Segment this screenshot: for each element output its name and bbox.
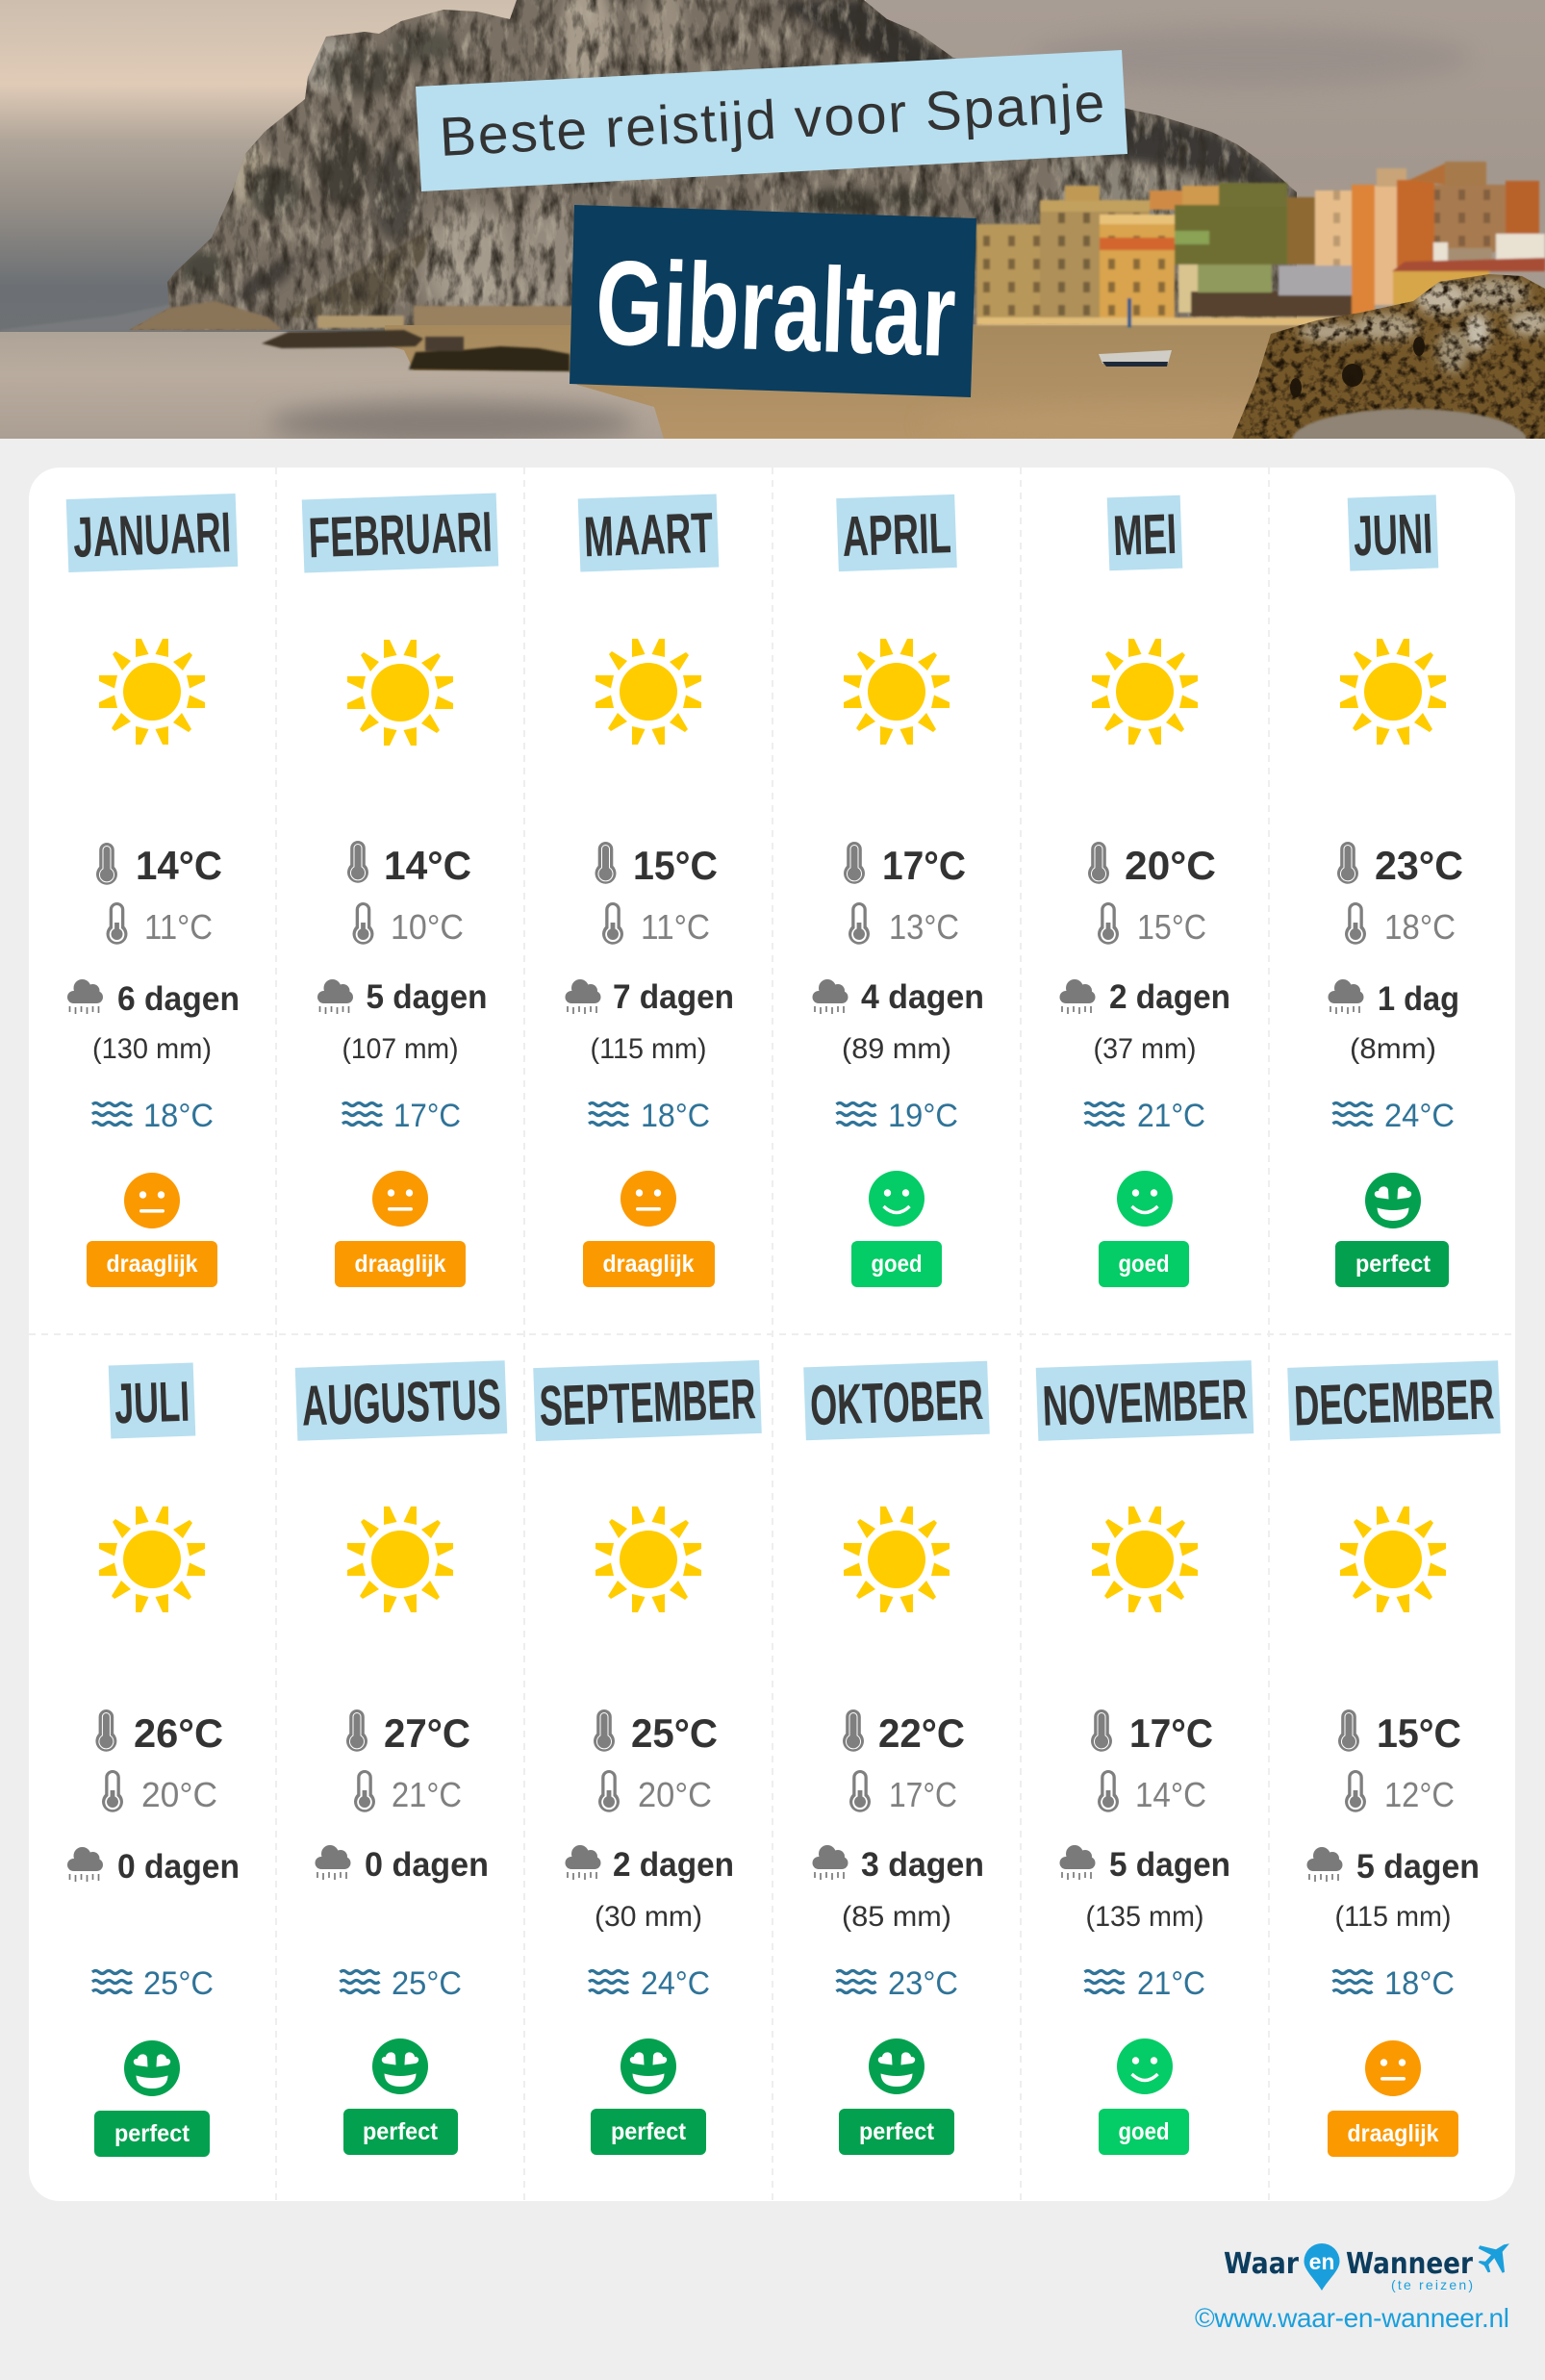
boat [1099, 350, 1172, 367]
rain days: 5 dagen [366, 978, 487, 1016]
subtitle label: Beste reistijd voor Spanje: Beste reistijd voor Spanje [438, 72, 1106, 168]
rating badge [87, 1241, 217, 1287]
sea temperature: 19°C [888, 1098, 958, 1134]
logo: Waar en Wanneer: Waar [1224, 2247, 1299, 2281]
low temperature: 13°C [889, 907, 959, 947]
sea temperature [92, 1098, 214, 1134]
month label: november [1036, 1360, 1254, 1441]
rainfall: (37 mm) [1093, 1033, 1197, 1065]
sea temperature [1333, 1098, 1455, 1134]
high temperature: 17°C [882, 843, 966, 888]
month label: mei [1107, 495, 1182, 570]
high temperature [347, 841, 471, 888]
sea temperature [1333, 1965, 1455, 2002]
logo: Waar en Wanneer: (te reizen) [1391, 2277, 1473, 2292]
rainfall: (130 mm) [92, 1033, 212, 1065]
sea temperature: 24°C [641, 1965, 710, 2002]
high temperature: 14°C [384, 843, 471, 888]
rating badge: perfect [114, 2120, 190, 2147]
rating badge [1335, 1241, 1449, 1287]
icon: sun [347, 1506, 453, 1612]
rating badge: perfect [859, 2118, 935, 2145]
high temperature: 26°C [134, 1710, 223, 1756]
cell: juni [1328, 494, 1463, 1287]
sea reflection [269, 402, 635, 444]
icon: sun [347, 640, 453, 746]
icon: sun [844, 1506, 950, 1612]
rain days [67, 979, 240, 1018]
sea temperature [837, 1098, 958, 1134]
low temperature: 18°C [1384, 907, 1456, 947]
month label: april [836, 494, 957, 571]
rating badge: goed [1118, 1251, 1170, 1278]
rain days: 2 dagen [1109, 978, 1230, 1016]
sea temperature: 24°C [1384, 1098, 1455, 1134]
month label: januari [66, 494, 238, 572]
high temperature [96, 843, 222, 888]
month label: augustus [295, 1360, 507, 1441]
high temperature: 27°C [384, 1710, 470, 1756]
rain days: 4 dagen [861, 978, 984, 1016]
beach sand [385, 325, 1300, 439]
cell: maart [566, 494, 734, 1287]
rating badge: perfect [611, 2118, 687, 2145]
rain days [566, 978, 734, 1016]
high temperature: 14°C [136, 843, 222, 888]
icon: sun [595, 639, 701, 745]
month label: maart: MAART [583, 501, 714, 569]
sea temperature [589, 1965, 710, 2002]
rain days [317, 978, 487, 1016]
high temperature [1091, 1709, 1213, 1756]
rainfall: (8mm) [1350, 1033, 1436, 1065]
month label: november: NOVEMBER [1041, 1367, 1249, 1438]
cell: augustus [295, 1360, 507, 2155]
month label: januari: JANUARI [72, 500, 232, 570]
low temperature [598, 1770, 712, 1814]
icon: sun [99, 639, 205, 745]
high temperature [1088, 842, 1216, 888]
rating badge: draaglijk [106, 1251, 198, 1278]
rating badge [343, 2109, 458, 2155]
rating face [869, 2038, 924, 2094]
low temperature: 12°C [1384, 1775, 1455, 1814]
rating badge: draaglijk [1347, 2120, 1439, 2147]
buildings [976, 162, 1545, 327]
rating face [1117, 1171, 1173, 1227]
low temperature: 20°C [141, 1775, 217, 1814]
rating face [124, 1173, 180, 1228]
high temperature [844, 842, 966, 888]
sea temperature: 25°C [143, 1965, 214, 2002]
month label: juli: JULI [114, 1370, 190, 1435]
rating badge: goed [872, 1251, 922, 1278]
rain days [1060, 1845, 1230, 1884]
rainfall: (115 mm) [591, 1033, 706, 1065]
foreground boulder [1291, 408, 1528, 439]
sea temperature: 21°C [1137, 1965, 1205, 2002]
month label: april: APRIL [841, 501, 952, 569]
rain days: 1 dag [1378, 980, 1459, 1018]
month label: oktober [803, 1361, 990, 1440]
low temperature [849, 1770, 957, 1814]
month label: juli [109, 1362, 195, 1439]
sea temperature: 17°C [393, 1098, 461, 1134]
month label: september [533, 1360, 762, 1441]
low temperature [1098, 1770, 1206, 1814]
rating face [869, 1171, 924, 1227]
sea [0, 332, 664, 439]
month label: februari: FEBRUARI [307, 500, 494, 570]
sea temperature [342, 1098, 461, 1134]
rainfall: (89 mm) [842, 1033, 951, 1065]
rain days: 0 dagen [117, 1848, 240, 1886]
sand bar tone [924, 406, 1385, 441]
rain days: 2 dagen [613, 1846, 734, 1884]
sea temperature [1085, 1965, 1205, 2002]
rating badge [583, 1241, 715, 1287]
rainfall: (85 mm) [842, 1901, 951, 1933]
rainfall: (135 mm) [1085, 1901, 1204, 1933]
cell: mei [1060, 495, 1230, 1287]
icon: sun [99, 1506, 205, 1612]
rain days [566, 1845, 734, 1884]
low temperature: 11°C [144, 907, 213, 947]
rain days [812, 1845, 984, 1884]
icon: map pin: en [1309, 2249, 1334, 2274]
rain days: 7 dagen [613, 978, 734, 1016]
high temperature: 25°C [631, 1710, 718, 1756]
high temperature [1337, 842, 1463, 888]
rating face [621, 1171, 676, 1227]
rating badge: perfect [1355, 1251, 1431, 1278]
rock face [115, 0, 1308, 337]
rating face [1365, 1173, 1421, 1228]
cell: juli [67, 1362, 240, 2157]
rating badge [591, 2109, 706, 2155]
panel: monthly climate table [29, 468, 1515, 2201]
sea temperature: 18°C [1384, 1965, 1455, 2002]
sea temperature: 23°C [888, 1965, 958, 2002]
low buildings along the shore [317, 306, 577, 328]
cell: oktober [803, 1361, 990, 2155]
rating badge [94, 2111, 210, 2157]
cell: april [812, 494, 984, 1287]
rating face [621, 2038, 676, 2094]
low temperature [352, 902, 464, 947]
rain days: 5 dagen [1356, 1848, 1480, 1886]
sea temperature: 21°C [1137, 1098, 1205, 1134]
rain days [316, 1845, 489, 1884]
sea temperature: 18°C [641, 1098, 710, 1134]
high temperature: 15°C [1377, 1710, 1461, 1756]
icon: sun [595, 1506, 701, 1612]
rain days: 3 dagen [861, 1846, 984, 1884]
rainfall: (30 mm) [595, 1901, 702, 1933]
rating face [124, 2040, 180, 2096]
rating badge: draaglijk [602, 1251, 695, 1278]
low temperature [354, 1770, 462, 1814]
rating badge: perfect [363, 2118, 439, 2145]
logo: Waar en Wanneer [1224, 2243, 1509, 2292]
rating badge: draaglijk [354, 1251, 446, 1278]
sea temperature [341, 1965, 462, 2002]
icon: sun [844, 639, 950, 745]
high temperature [1338, 1709, 1461, 1756]
low temperature [1345, 902, 1456, 947]
month label: maart [578, 494, 719, 571]
rain days [1306, 1847, 1480, 1886]
sea temperature [92, 1965, 214, 2002]
rainfall: (107 mm) [342, 1033, 458, 1065]
rating badge: goed [1118, 2118, 1170, 2145]
logo: Waar en Wanneer: Wanneer [1346, 2247, 1473, 2281]
banner photo: rock of Gibraltar and beach [0, 0, 1545, 472]
low temperature: 14°C [1135, 1775, 1206, 1814]
icon: airplane [1479, 2243, 1509, 2273]
cell: februari [302, 493, 498, 1287]
subtitle label: Beste reistijd voor Spanje [416, 50, 1127, 191]
cell: september [533, 1360, 762, 2155]
rating badge [1099, 1241, 1189, 1287]
rating face [372, 1171, 428, 1227]
rain days [1060, 978, 1230, 1016]
rating badge [851, 1241, 942, 1287]
icon: sun [1340, 1506, 1446, 1612]
high temperature [346, 1709, 470, 1756]
sea temperature: 18°C [143, 1098, 214, 1134]
title label: Gibraltar: Gibraltar [594, 236, 958, 382]
low temperature: 10°C [391, 907, 464, 947]
rain days: 0 dagen [365, 1846, 489, 1884]
month label: oktober: OKTOBER [809, 1368, 984, 1437]
month label: juni: JUNI [1353, 502, 1433, 568]
high temperature: 20°C [1125, 843, 1216, 888]
distant hill [11, 306, 169, 331]
sea temperature: 25°C [392, 1965, 462, 2002]
icon: sun [1340, 639, 1446, 745]
website url: ©www.waar-en-wanneer.nl [1195, 2303, 1509, 2333]
rating face [372, 2038, 428, 2094]
high temperature [595, 842, 718, 888]
cell: januari [66, 494, 240, 1287]
high temperature: 17°C [1129, 1710, 1213, 1756]
high temperature [95, 1709, 223, 1756]
rating badge [1099, 2109, 1189, 2155]
high temperature: 23°C [1375, 843, 1463, 888]
low temperature: 11°C [641, 907, 710, 947]
headland base [129, 301, 282, 330]
cell: december [1287, 1360, 1501, 2157]
month label: mei: MEI [1112, 502, 1178, 568]
icon: sun [1092, 1506, 1198, 1612]
rating badge [335, 1241, 466, 1287]
high temperature [594, 1709, 718, 1756]
month label: februari [302, 493, 498, 573]
rainfall: (115 mm) [1335, 1901, 1451, 1933]
foreground rock [1222, 269, 1545, 443]
icon: sun [1092, 639, 1198, 745]
icon: map pin [1304, 2243, 1339, 2291]
low temperature [1345, 1770, 1455, 1814]
low temperature [848, 902, 959, 947]
low temperature: 20°C [638, 1775, 712, 1814]
rating badge [839, 2109, 954, 2155]
rating badge [1328, 2111, 1458, 2157]
high temperature [843, 1709, 965, 1756]
low temperature [102, 1770, 217, 1814]
cell: november [1036, 1360, 1254, 2155]
low temperature: 15°C [1137, 907, 1206, 947]
high temperature: 22°C [878, 1710, 965, 1756]
low temperature [1098, 902, 1206, 947]
month label: juni [1348, 494, 1438, 571]
month label: september: SEPTEMBER [538, 1367, 757, 1438]
low temperature: 21°C [392, 1775, 462, 1814]
low temperature [106, 902, 213, 947]
rating face [1365, 2040, 1421, 2096]
rain days [1328, 979, 1459, 1018]
low temperature [602, 902, 710, 947]
sky [0, 0, 1545, 337]
sea temperature [1085, 1098, 1205, 1134]
month label: augustus: AUGUSTUS [300, 1367, 502, 1438]
sea temperature [837, 1965, 958, 2002]
sea temperature [589, 1098, 710, 1134]
rain days [67, 1847, 240, 1886]
rain days: 5 dagen [1109, 1846, 1230, 1884]
high temperature: 15°C [633, 843, 718, 888]
breakwater rocks [262, 330, 570, 371]
rating face [1117, 2038, 1173, 2094]
low temperature: 17°C [889, 1775, 957, 1814]
title label: Gibraltar [570, 205, 976, 397]
rain days: 6 dagen [117, 980, 240, 1018]
